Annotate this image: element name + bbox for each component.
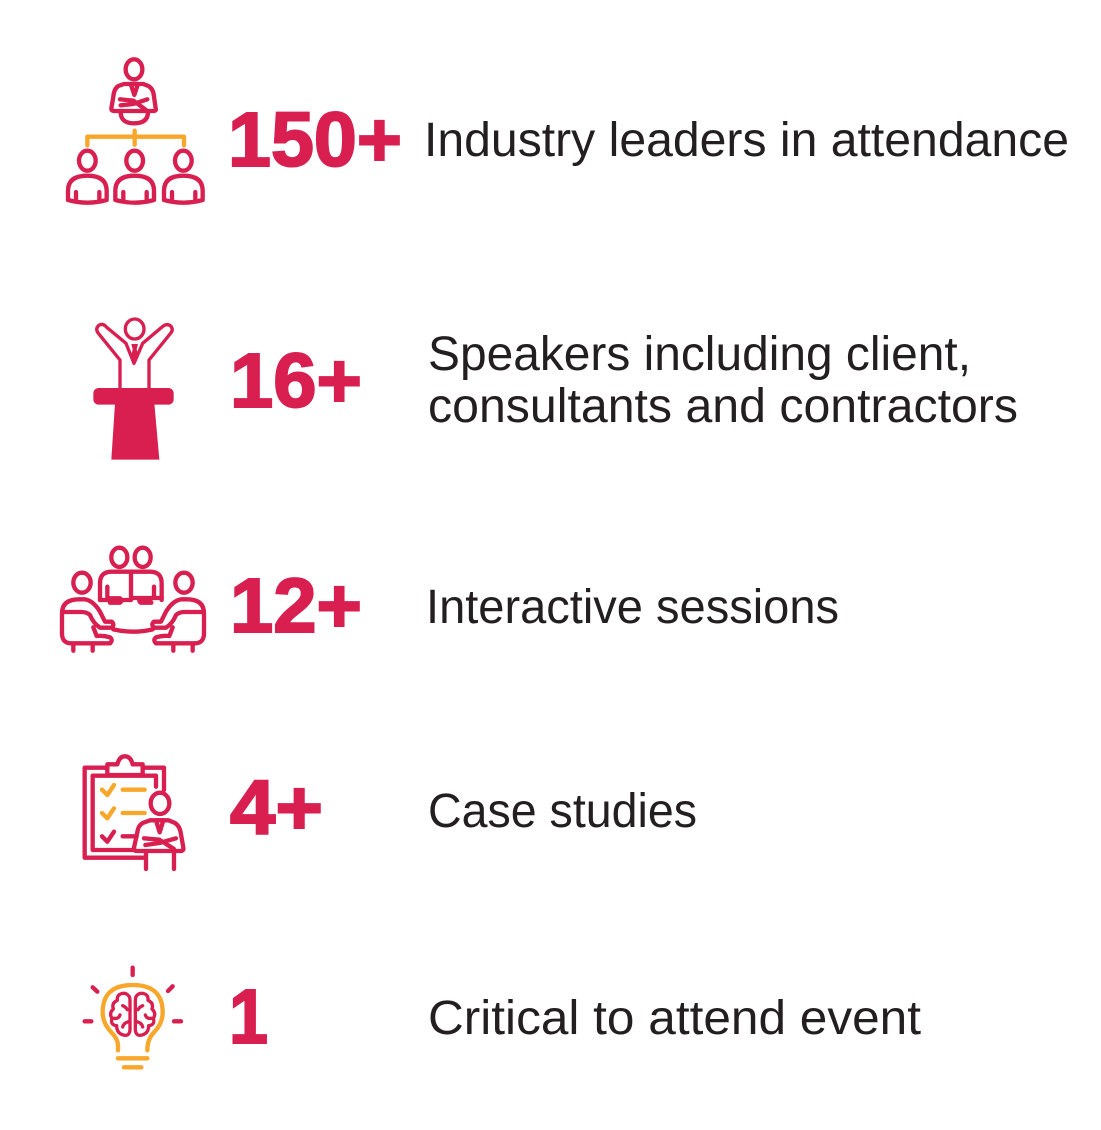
row: speakers <box>93 319 1018 460</box>
icon: light bulb with brain <box>85 968 181 1067</box>
icon: clipboard checklist with presenter <box>85 756 183 869</box>
row: case studies <box>85 756 697 869</box>
label: industry leaders: Industry leaders in attendance <box>424 114 1069 167</box>
label: speakers: Speakers including client, <box>428 328 971 381</box>
number: 1: 1 <box>229 974 268 1060</box>
icon: meeting table <box>62 548 204 651</box>
label: interactive sessions: Interactive sessions <box>426 581 839 634</box>
icon: leader with team hierarchy <box>68 59 203 203</box>
row: critical event <box>85 968 921 1067</box>
number: 12+: 12+ <box>230 563 362 649</box>
label: speakers <box>428 328 1018 433</box>
number: 150+: 150+ <box>228 97 402 183</box>
label: case studies: Case studies <box>428 785 697 838</box>
number: 4+: 4+ <box>230 765 323 851</box>
label: critical event: Critical to attend event <box>428 992 921 1045</box>
row: interactive sessions <box>62 548 839 651</box>
number: 16+: 16+ <box>230 338 362 424</box>
label: speakers: consultants and contractors <box>428 380 1018 433</box>
icon: speaker at podium <box>93 319 174 460</box>
row: industry leaders <box>68 59 1069 203</box>
